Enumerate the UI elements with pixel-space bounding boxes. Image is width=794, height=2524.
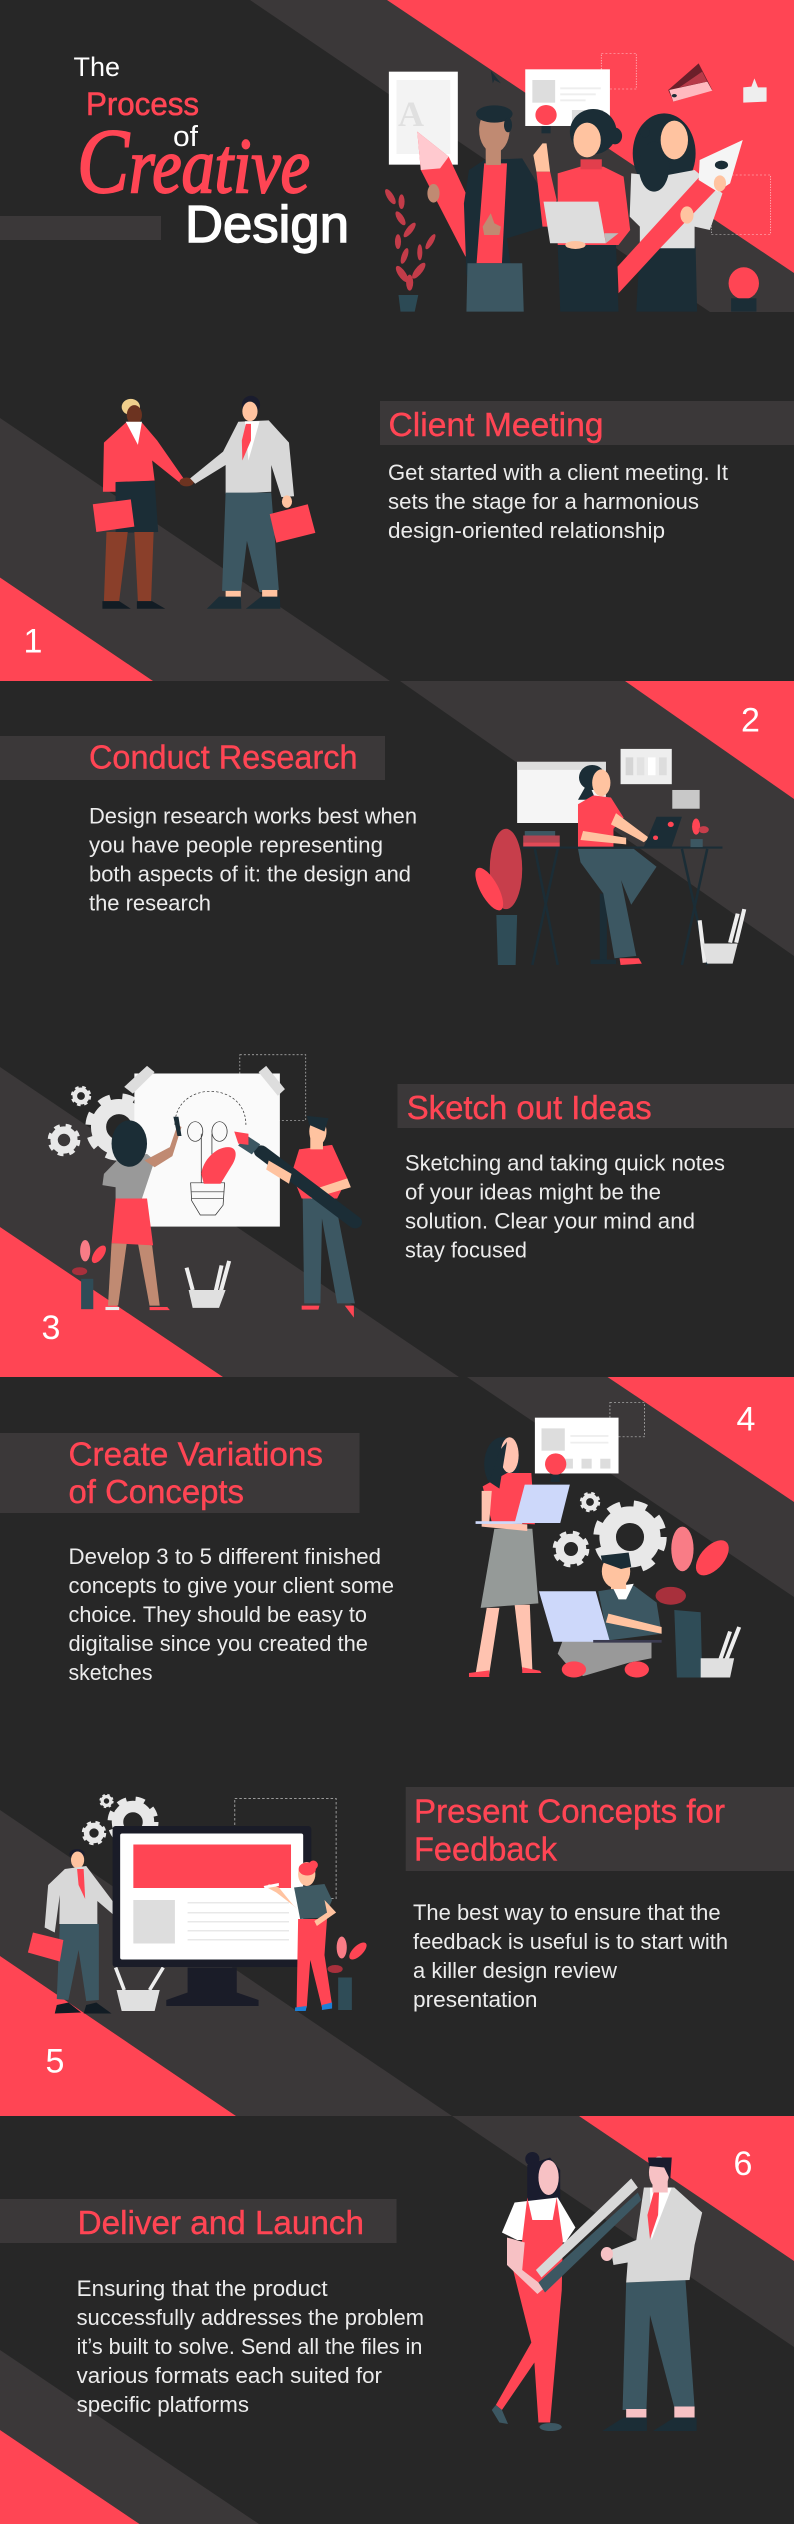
icon: layout card bbox=[535, 1418, 619, 1473]
title: Creative bbox=[77, 110, 310, 212]
illustration: creative team bbox=[383, 53, 771, 312]
heading bbox=[380, 401, 794, 445]
ruler bbox=[536, 2178, 641, 2292]
icon: pen pot bbox=[187, 1261, 229, 1308]
heading: Feedback bbox=[414, 1830, 557, 1868]
heading: Create Variations bbox=[68, 1435, 323, 1472]
icon: note card bbox=[672, 790, 700, 809]
background: step 4 diagonal bands bbox=[467, 1377, 794, 1597]
text block bbox=[405, 1150, 725, 1262]
selection frame bbox=[235, 1798, 336, 1898]
desk bbox=[522, 848, 722, 965]
text block: the research bbox=[89, 890, 211, 916]
person: seated woman bbox=[578, 765, 657, 965]
icon: cactus bbox=[729, 267, 759, 312]
text block: it’s built to solve. Send all the files in bbox=[77, 2334, 422, 2359]
panel: step 5 present concepts bbox=[28, 1787, 794, 2080]
title bbox=[0, 52, 349, 254]
text block: concepts to give your client some bbox=[68, 1573, 394, 1598]
person: woman with laptop bbox=[533, 109, 630, 312]
number 1: 1 bbox=[24, 622, 42, 660]
heading: of Concepts bbox=[68, 1473, 244, 1510]
sketch: red paint bbox=[201, 1147, 236, 1184]
icon: pot and pens bbox=[674, 1610, 739, 1677]
text block: of your ideas might be the bbox=[405, 1179, 661, 1204]
background: step 3 diagonal bands bbox=[0, 1067, 459, 1377]
icon: chart card bbox=[621, 749, 672, 784]
panel: step 1 client meeting bbox=[24, 396, 794, 660]
text block: presentation bbox=[413, 1987, 538, 2012]
number 2: 2 bbox=[741, 702, 760, 740]
icon: leaves bbox=[656, 1527, 735, 1605]
text block bbox=[68, 1544, 394, 1685]
illustration: woman and seated man with laptops bbox=[469, 1402, 739, 1677]
text block: digitalise since you created the bbox=[68, 1631, 368, 1656]
text block bbox=[89, 804, 417, 916]
icon: plant bbox=[72, 1240, 109, 1309]
person: standing woman bbox=[469, 1437, 570, 1677]
panel: step 3 sketch out ideas bbox=[42, 1055, 794, 1347]
sketch: light bulb bbox=[175, 1091, 246, 1215]
icon: monitor bbox=[113, 1826, 311, 2006]
person: woman pointing bbox=[264, 1860, 336, 2011]
heading: Client Meeting bbox=[388, 406, 604, 443]
text block: The best way to ensure that the bbox=[413, 1900, 721, 1925]
heading bbox=[0, 736, 385, 780]
text block: both aspects of it: the design and bbox=[89, 862, 411, 886]
text block: various formats each suited for bbox=[77, 2363, 382, 2388]
heading bbox=[0, 1433, 360, 1513]
text block: solution. Clear your mind and bbox=[405, 1208, 695, 1233]
number 5: 5 bbox=[46, 2042, 64, 2080]
text block: Develop 3 to 5 different finished bbox=[68, 1544, 381, 1569]
text block: Sketching and taking quick notes bbox=[405, 1150, 725, 1175]
gears: step 4 bbox=[555, 1493, 662, 1569]
text block: stay focused bbox=[405, 1237, 527, 1262]
heading: Conduct Research bbox=[89, 739, 358, 776]
text block: feedback is useful is to start with bbox=[413, 1929, 728, 1954]
person: woman in overalls bbox=[492, 2152, 575, 2431]
person: man in grey suit bbox=[601, 2156, 702, 2431]
icon: books bbox=[523, 831, 560, 847]
illustration: couple carrying a ruler bbox=[492, 2152, 702, 2431]
number 6: 6 bbox=[734, 2145, 752, 2183]
background: header diagonal bands bbox=[250, 0, 794, 312]
icon: selection frames bbox=[601, 53, 771, 234]
selection frame bbox=[610, 1402, 644, 1437]
text block: Get started with a client meeting. It bbox=[388, 460, 728, 485]
panel: step 6 deliver and launch bbox=[0, 2145, 752, 2431]
illustration: sketching a bulb bbox=[72, 1055, 355, 1318]
sketch paper bbox=[124, 1066, 285, 1227]
text block: Design research works best when bbox=[89, 804, 417, 828]
icon: light bulb bbox=[535, 105, 557, 133]
text block: design-oriented relationship bbox=[388, 518, 665, 543]
person: woman with pen tool bbox=[618, 113, 743, 312]
person: man with briefcase bbox=[28, 1849, 113, 2014]
text block bbox=[77, 2276, 424, 2417]
text block: choice. They should be easy to bbox=[68, 1602, 367, 1627]
person: man with pencil bbox=[417, 105, 545, 312]
title: Process bbox=[86, 86, 199, 122]
illustration: handshake bbox=[93, 396, 315, 609]
icon: thumbs up bbox=[743, 78, 767, 103]
icon: laptop bbox=[644, 817, 682, 847]
background: step 6 diagonal bands bbox=[0, 2116, 794, 2524]
panel: step 2 conduct research bbox=[0, 702, 760, 965]
heading bbox=[406, 1787, 794, 1871]
icon: letter frame bbox=[389, 72, 458, 165]
background: step 1 diagonal bands bbox=[0, 418, 390, 681]
text block: specific platforms bbox=[77, 2392, 249, 2417]
person: man with briefcase bbox=[190, 396, 315, 609]
person: woman with briefcase bbox=[93, 399, 194, 609]
text block: sketches bbox=[68, 1660, 152, 1685]
heading: Present Concepts for bbox=[414, 1792, 725, 1830]
text block: successfully addresses the problem bbox=[77, 2305, 424, 2330]
number 3: 3 bbox=[42, 1309, 60, 1347]
panel: step 4 create variations bbox=[0, 1401, 755, 1685]
icon: letter A: A bbox=[398, 94, 424, 134]
icon: browser window bbox=[517, 762, 606, 823]
heading: Deliver and Launch bbox=[78, 2204, 364, 2241]
person: seated man bbox=[539, 1552, 662, 1677]
illustration: presentation on monitor bbox=[28, 1798, 369, 2014]
person: woman drawing bbox=[102, 1117, 182, 1310]
icon: small plant bbox=[691, 819, 709, 847]
title: The bbox=[74, 52, 120, 82]
title: Design bbox=[185, 196, 349, 254]
icon: light bulb bbox=[545, 1453, 566, 1482]
text block bbox=[413, 1900, 728, 2012]
title: of bbox=[173, 121, 199, 153]
heading bbox=[0, 2199, 396, 2243]
icon: plant bbox=[328, 1936, 369, 2010]
number 4: 4 bbox=[737, 1401, 755, 1439]
text block: you have people representing bbox=[89, 832, 383, 858]
icon: plant bbox=[383, 188, 437, 312]
icon: pen pot bbox=[116, 1968, 163, 2011]
heading: Sketch out Ideas bbox=[407, 1089, 652, 1126]
icon: pen pot bbox=[700, 909, 744, 964]
text block: sets the stage for a harmonious bbox=[388, 489, 699, 514]
illustration: woman working at desk bbox=[470, 749, 744, 965]
icon: layout card bbox=[525, 69, 610, 126]
selection frame bbox=[240, 1055, 306, 1120]
text block: a killer design review bbox=[413, 1958, 617, 1983]
heading bbox=[398, 1084, 794, 1128]
text block bbox=[388, 460, 728, 543]
background: step 5 diagonal bands bbox=[0, 1810, 452, 2116]
text block: Ensuring that the product bbox=[77, 2276, 328, 2301]
person: man with brush bbox=[234, 1116, 355, 1318]
gears: step 5 bbox=[83, 1795, 156, 1844]
icon: colour swatch fan bbox=[668, 63, 712, 102]
icon: cursor bbox=[491, 71, 501, 83]
background: step 2 diagonal bands bbox=[400, 681, 794, 956]
gears: step 3 bbox=[50, 1087, 149, 1157]
icon: plant bbox=[470, 829, 522, 965]
